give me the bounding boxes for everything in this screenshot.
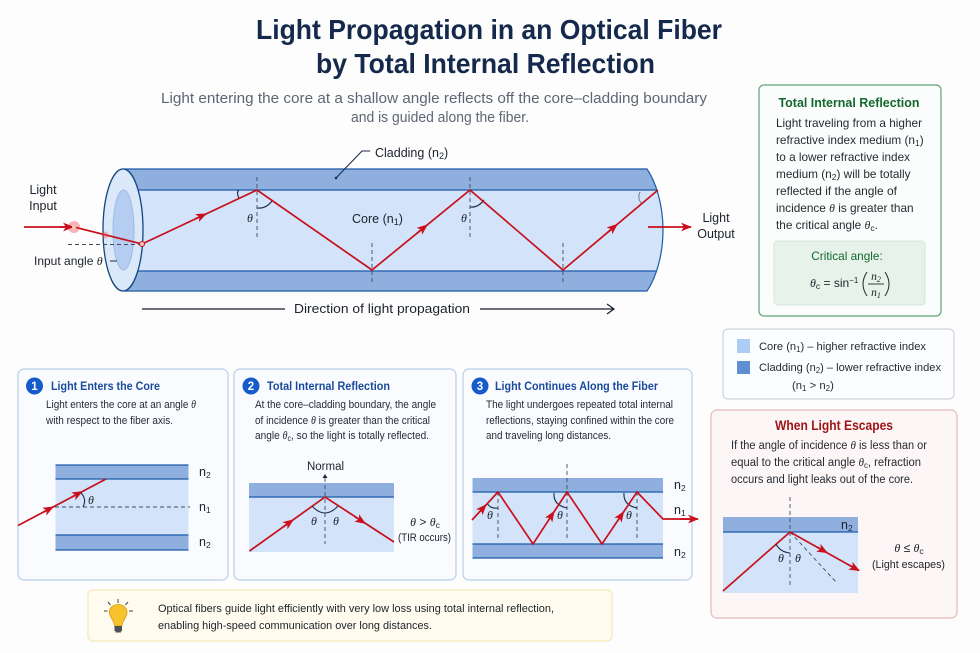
- title: by Total Internal Reflection: [316, 48, 655, 79]
- legend text: > n: [806, 380, 826, 392]
- critical angle box: −1: [849, 276, 859, 285]
- legend swatch: core: [737, 339, 750, 353]
- callout: key takeaway: [88, 590, 612, 641]
- definition text: c: [870, 223, 875, 233]
- badge 1: 1: [31, 381, 38, 393]
- label: light input: [29, 183, 57, 213]
- label: cladding: ): [444, 146, 448, 160]
- panel: when light escapes: [711, 410, 957, 618]
- definition text: the critical angle θ: [776, 218, 870, 232]
- label: cladding: [335, 146, 448, 179]
- panel 1 diagram: 2: [206, 540, 211, 550]
- panel 3 heading: Light Continues Along the Fiber: [495, 379, 658, 393]
- panel 3 text: and traveling long distances.: [486, 430, 611, 442]
- escape diagram: 2: [848, 523, 853, 533]
- label: core: Core (n: [352, 212, 394, 226]
- label: light input: Light: [29, 183, 57, 197]
- panel 3 diagram: n: [674, 478, 681, 492]
- legend text: ): [830, 380, 834, 392]
- critical angle box: = sin: [820, 276, 849, 290]
- panel 3 diagram: 1: [681, 508, 686, 518]
- escape diagram: θ: [795, 551, 801, 565]
- legend: [723, 329, 954, 399]
- label: light output: [697, 211, 735, 241]
- label: cladding: Cladding (n: [375, 146, 439, 160]
- label: core: ): [399, 212, 403, 226]
- direction of propagation arrow: Direction of light propagation: [294, 301, 470, 316]
- definition text: refractive index medium (n: [776, 133, 915, 147]
- escape text: occurs and light leaks out of the core.: [731, 474, 913, 486]
- panel 2 text: , so the light is totally reflected.: [291, 430, 429, 442]
- definition text: to a lower refractive index: [776, 150, 910, 164]
- panel 1 diagram: n: [199, 535, 206, 549]
- panel 1 diagram: n: [199, 500, 206, 514]
- panel 2 diagram: [249, 461, 451, 552]
- definition text: ) will be totally: [836, 167, 911, 181]
- label: core: 1: [394, 217, 399, 227]
- escape diagram: (Light escapes): [872, 559, 945, 571]
- label: light output: Light: [702, 211, 730, 225]
- panel 3 diagram: n: [674, 503, 681, 517]
- panel 2 text: angle θ: [255, 430, 288, 442]
- critical angle box: 1: [877, 291, 881, 300]
- escape heading: When Light Escapes: [775, 418, 893, 433]
- escape diagram: c: [919, 546, 924, 556]
- escape diagram: n: [841, 518, 848, 532]
- definition text: 1: [915, 138, 920, 148]
- subtitle: [161, 90, 708, 126]
- definition text: incidence θ is greater than: [776, 201, 914, 215]
- panel 1 heading: Light Enters the Core: [51, 379, 160, 393]
- panel 3: light continues along the fiber: [463, 369, 698, 580]
- fiber core: [123, 190, 663, 271]
- panel 2 text: of incidence θ is greater than the critical: [255, 415, 430, 427]
- theta labels on fiber: θ: [461, 211, 467, 225]
- definition text: 2: [832, 172, 837, 182]
- badge 2: [242, 378, 260, 394]
- definition heading: Total Internal Reflection: [778, 95, 920, 110]
- legend text: 1: [802, 384, 807, 393]
- definition text: [776, 116, 924, 233]
- panel 2 text: At the core–cladding boundary, the angle: [255, 399, 436, 411]
- panel 1 diagram: 1: [206, 505, 211, 515]
- legend text: (n: [792, 380, 802, 392]
- critical angle box: [774, 241, 925, 305]
- fiber input end face: [103, 169, 143, 291]
- callout text: enabling high-speed communication over long distances.: [158, 620, 432, 632]
- legend text: ) – lower refractive index: [820, 362, 941, 374]
- panel 2 text: [255, 399, 436, 443]
- badge 3: 3: [477, 381, 483, 393]
- panel 2 diagram: (TIR occurs): [398, 532, 451, 544]
- definition text: reflected if the angle of: [776, 184, 898, 198]
- panel 3 diagram: 2: [681, 483, 686, 493]
- panel 3 diagram: [472, 464, 698, 560]
- main fiber diagram: [24, 169, 691, 291]
- panel 3 diagram: θ: [487, 508, 493, 522]
- label: light input: Input: [29, 199, 57, 213]
- panel 3 diagram: θ: [626, 508, 632, 522]
- panel 1 diagram: θ: [88, 493, 94, 507]
- escape text: [731, 440, 927, 486]
- fiber normals and angle marks: [68, 177, 642, 283]
- panel 3 diagram: n: [674, 545, 681, 559]
- panel 3 text: [486, 399, 674, 442]
- title: Light Propagation in an Optical Fiber: [256, 14, 722, 45]
- light ray: [24, 190, 658, 270]
- escape text: If the angle of incidence θ is less than or: [731, 440, 927, 452]
- definition text: Light traveling from a higher: [776, 116, 922, 130]
- legend text: Core (n: [759, 341, 797, 353]
- definition text: .: [875, 218, 878, 232]
- critical angle box: n: [871, 287, 877, 299]
- theta labels on fiber: θ: [247, 211, 253, 225]
- label: cladding: 2: [439, 151, 444, 161]
- panel 2 diagram: θ: [311, 514, 317, 528]
- critical angle box: Critical angle:: [811, 249, 883, 263]
- panel: total internal reflection definition: [759, 85, 941, 316]
- critical angle box: n: [871, 271, 877, 283]
- output arrow: [648, 226, 691, 228]
- panel 1 diagram: [18, 465, 211, 550]
- critical angle box: 2: [877, 275, 881, 284]
- panel 1 diagram: n: [199, 465, 206, 479]
- escape diagram: [723, 497, 945, 593]
- legend text: ) – higher refractive index: [800, 341, 926, 353]
- escape diagram: θ ≤ θ: [894, 541, 919, 555]
- panel 2 diagram: Normal: [307, 461, 344, 473]
- theta labels on fiber: [247, 211, 467, 225]
- badge 2: 2: [248, 381, 254, 393]
- legend text: 1: [796, 345, 801, 354]
- panel 2: total internal reflection: [234, 369, 456, 580]
- escape text: equal to the critical angle θ: [731, 457, 864, 469]
- title: [256, 14, 722, 79]
- definition text: medium (n: [776, 167, 832, 181]
- legend text: Cladding (n: [759, 362, 817, 374]
- label: input angle: Input angle θ: [34, 254, 103, 268]
- badge 1: [26, 378, 43, 394]
- label: light output: Output: [697, 227, 735, 241]
- panel 2 heading: Total Internal Reflection: [267, 379, 390, 393]
- panel 2 text: c: [287, 434, 291, 443]
- critical angle box: c: [816, 281, 821, 291]
- callout text: [158, 603, 554, 632]
- subtitle: Light entering the core at a shallow angle reflects off the core–cladding boundary: [161, 90, 708, 107]
- legend swatch: cladding: [737, 361, 750, 374]
- direction of propagation arrow: [142, 301, 614, 316]
- subtitle: and is guided along the fiber.: [351, 109, 529, 126]
- badge 3: [472, 378, 488, 394]
- panel 2 diagram: θ: [333, 514, 339, 528]
- definition text: ): [920, 133, 924, 147]
- escape text: , refraction: [868, 457, 921, 469]
- critical angle box: θ: [810, 276, 816, 290]
- panel 3 text: reflections, staying confined within the core: [486, 415, 674, 427]
- fiber cladding body: [123, 169, 663, 291]
- panel 3 diagram: θ: [557, 508, 563, 522]
- legend text: 2: [816, 366, 821, 375]
- escape diagram: θ: [778, 551, 784, 565]
- legend text: 2: [826, 384, 831, 393]
- panel 1 text: [45, 399, 196, 427]
- icon: light bulb: [104, 599, 133, 632]
- legend text: [759, 341, 941, 393]
- panel 1 text: with respect to the fiber axis.: [45, 415, 173, 427]
- panel 1 text: Light enters the core at an angle θ: [46, 399, 196, 411]
- panel 1 diagram: 2: [206, 470, 211, 480]
- panel 3 diagram: 2: [681, 550, 686, 560]
- panel 1: light enters the core: [18, 369, 228, 580]
- callout text: Optical fibers guide light efficiently with very low loss using total internal reflection,: [158, 603, 554, 615]
- panel 3 text: The light undergoes repeated total internal: [486, 399, 673, 411]
- panel 2 diagram: θ > θ: [410, 515, 436, 529]
- panel 2 diagram: c: [436, 520, 441, 530]
- escape text: c: [864, 461, 868, 470]
